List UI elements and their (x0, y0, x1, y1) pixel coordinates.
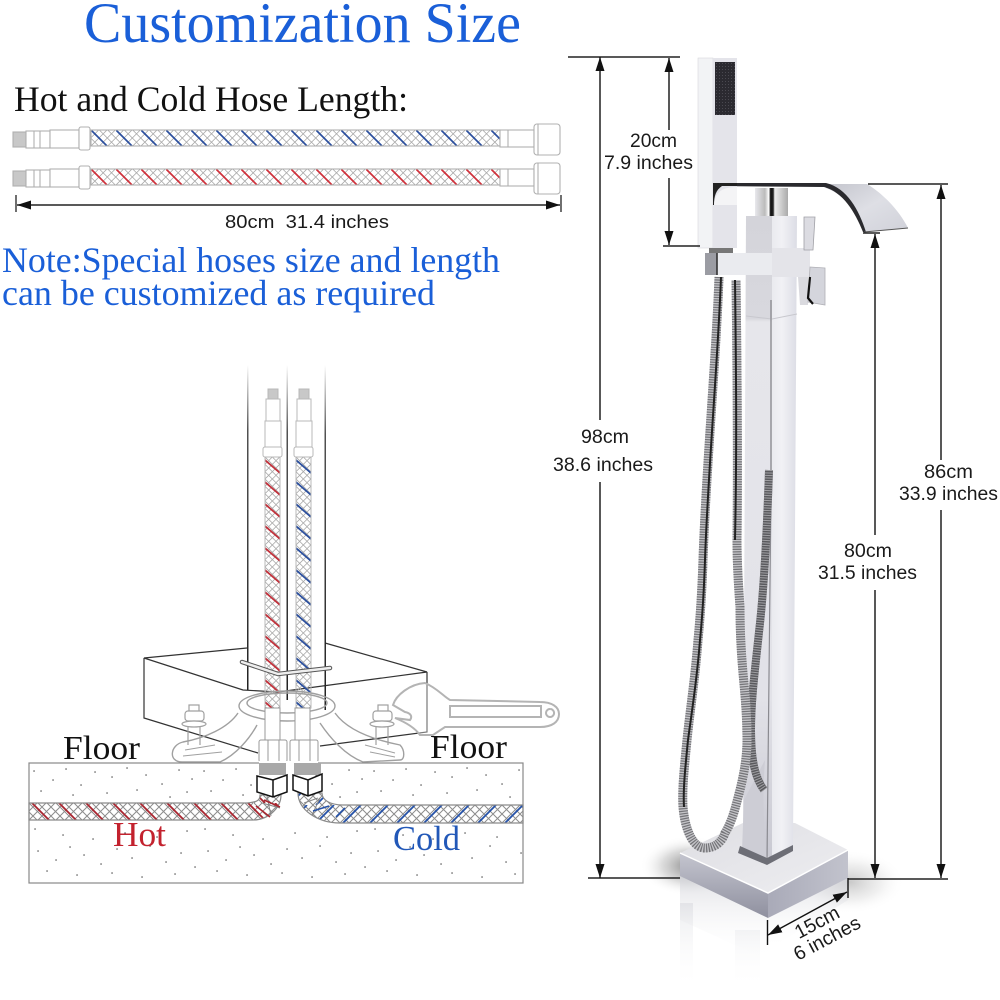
dimension 98cm: 98cm (581, 426, 629, 448)
neck (755, 188, 788, 216)
floor labels: Floor (430, 729, 508, 766)
right bolt (370, 705, 394, 745)
blue riser hose (294, 389, 313, 708)
mixer handle (772, 217, 825, 305)
spout (713, 183, 908, 232)
column band (242, 662, 330, 674)
hot label: Hot (113, 815, 166, 854)
red riser hose (263, 389, 282, 708)
floor slab (29, 761, 523, 883)
base flange (172, 691, 404, 762)
blue hose (13, 124, 560, 155)
dimension 98cm: 38.6 inches (553, 454, 653, 476)
dimension 86cm: 86cm (924, 461, 973, 483)
dimension 80cm: 31.5 inches (818, 562, 917, 584)
column walls (247, 365, 326, 710)
dimension 20cm: 20cm (630, 130, 677, 152)
heading: hose length: Hot and Cold Hose Length: (14, 79, 408, 119)
base reflection (680, 876, 848, 990)
hand shower (698, 58, 737, 248)
dimension 15cm: 6 inches (790, 912, 865, 965)
customization note: Note:Special hoses size and length (2, 240, 500, 280)
dimension 98cm (553, 57, 680, 878)
dimension 20cm: 7.9 inches (604, 152, 693, 174)
wrench (393, 683, 559, 735)
dimension 15cm (768, 878, 865, 965)
red hose (13, 163, 560, 194)
hot floor hose (29, 795, 281, 820)
square base (680, 822, 848, 918)
dimension 80cm: 80cm (844, 540, 892, 562)
installation diagram (29, 365, 559, 883)
dimension 20cm (604, 58, 700, 246)
mount bracket (705, 248, 772, 275)
fittings (259, 708, 318, 762)
faucet (680, 58, 908, 990)
threaded nuts (257, 763, 322, 797)
mounting box (144, 643, 427, 753)
customization note (2, 240, 500, 313)
hose length dimension (16, 195, 561, 232)
flexible shower hose (683, 277, 771, 848)
cold label: Cold (393, 819, 460, 858)
shaft (738, 216, 797, 865)
dimension 86cm: 33.9 inches (899, 483, 998, 505)
left bolt (182, 705, 206, 745)
cold floor hose (298, 793, 523, 823)
dimension 80cm (818, 233, 917, 878)
hose length dimension: 80cm 31.4 inches (225, 211, 389, 232)
floor labels (63, 729, 508, 767)
customization note: can be customized as required (2, 273, 435, 313)
floor labels: Floor (63, 730, 141, 767)
dimension 86cm (848, 184, 998, 879)
dimension 15cm: 15cm (791, 902, 843, 944)
base shadow (640, 836, 905, 914)
